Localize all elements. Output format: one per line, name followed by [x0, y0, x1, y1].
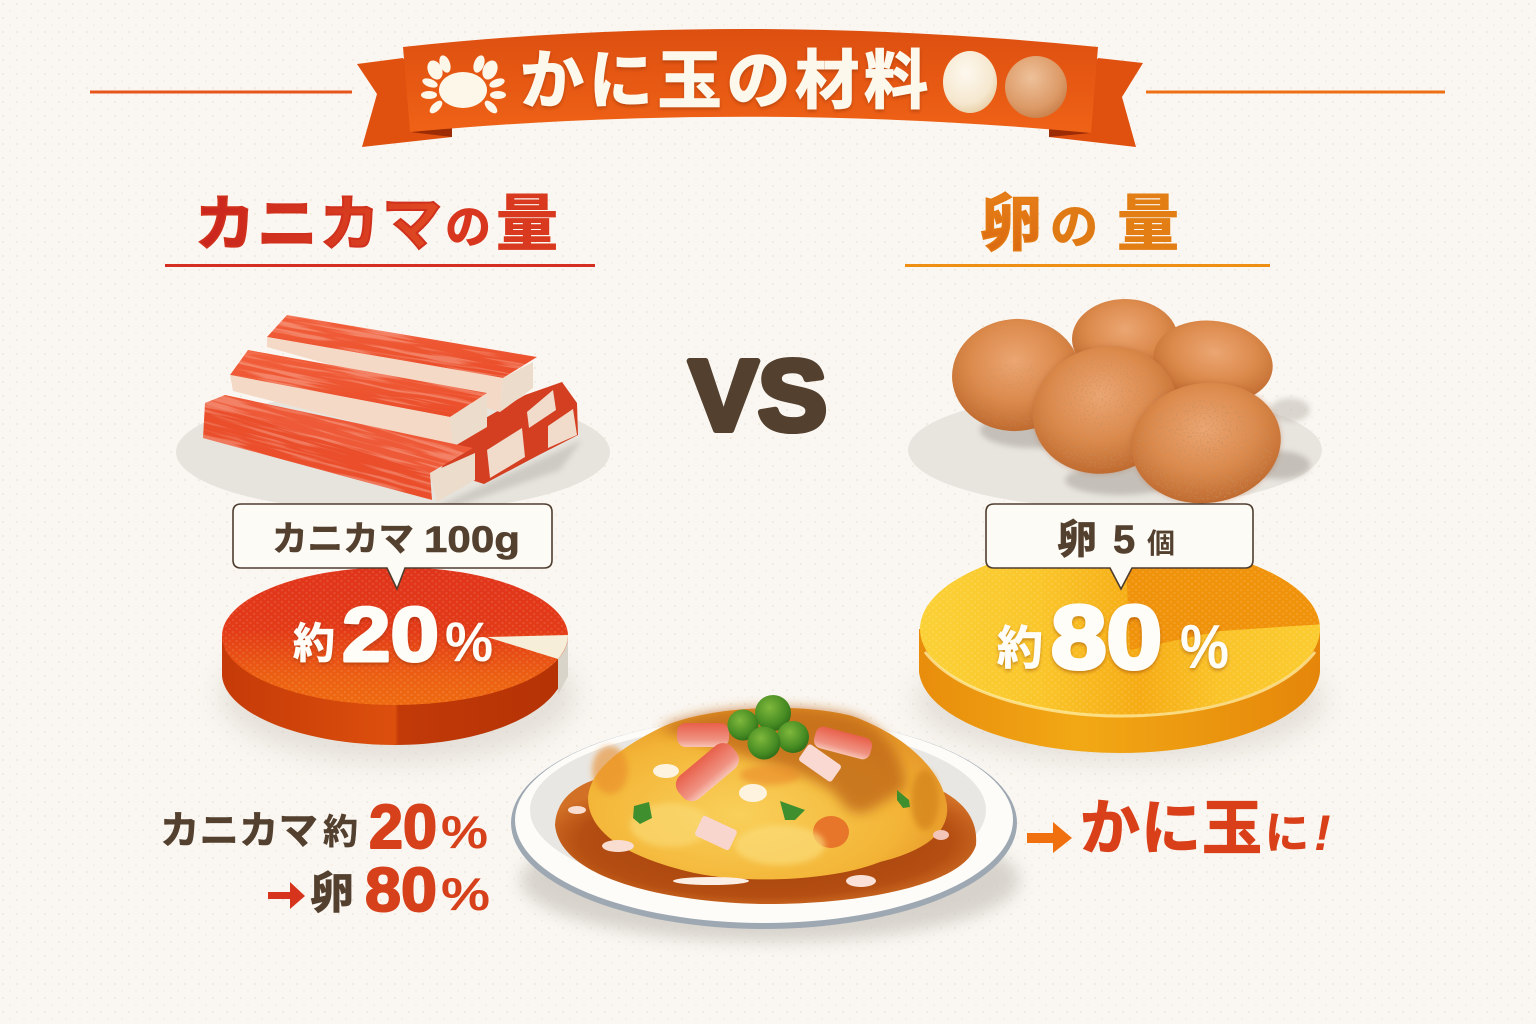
pie value: [293, 592, 493, 678]
pie wedge: [487, 635, 568, 659]
banner title text: かに玉の材料: [520, 30, 928, 122]
ribbon tails: [357, 58, 1143, 147]
summary text: crab stick 20% to egg 80%: [160, 793, 490, 925]
pie value: %: [445, 610, 493, 673]
callout: five eggs: [986, 504, 1253, 589]
arrow: [268, 882, 305, 909]
summary text: crab stick 20% to egg 80%: 卵: [310, 857, 354, 921]
pie side wall: [222, 636, 568, 745]
egg: middle: [1018, 330, 1192, 490]
front stick: [203, 395, 475, 502]
heading: crab stick amount: [165, 173, 595, 267]
pie chart: crab stick 20%: [220, 567, 576, 763]
pie value: 80: [1051, 588, 1162, 688]
callout: five eggs: 個: [1147, 522, 1175, 562]
result text: becomes kani-tama: かに玉: [1080, 780, 1262, 867]
pie rim highlight: [925, 652, 1315, 716]
summary text: crab stick 20% to egg 80%: 20: [369, 793, 437, 862]
icon: crab: [421, 54, 506, 115]
illustration: five brown eggs on a plate: [908, 299, 1322, 513]
heading: crab stick amount: の: [445, 191, 491, 257]
pie value: 20: [342, 592, 439, 678]
illustration: crab sticks on a plate: [176, 315, 610, 504]
small rear stick ends: [440, 382, 578, 484]
callout: crab stick 100g: [233, 504, 552, 589]
crab pieces: [671, 723, 874, 851]
pie wedge: orange slice: [1126, 564, 1320, 650]
title banner: [90, 29, 1445, 147]
heading: crab stick amount: 量: [496, 173, 558, 263]
icon: brown egg: [1005, 56, 1067, 118]
middle stick: [230, 350, 487, 444]
arrow: [1027, 822, 1072, 853]
summary text: crab stick 20% to egg 80%: 80: [365, 856, 437, 925]
back stick: [267, 315, 537, 412]
heading: egg amount: [905, 173, 1270, 267]
illustration: kani-tama dish: [511, 695, 1020, 942]
ribbon body: [403, 29, 1098, 133]
plate: [511, 717, 1017, 929]
pie value: [997, 588, 1229, 688]
heading: egg amount: の: [1050, 187, 1098, 257]
sauce: [555, 778, 976, 904]
pie value: 約: [997, 612, 1043, 678]
callout: five eggs: 卵: [1057, 507, 1097, 565]
result text: becomes kani-tama: !: [1314, 805, 1331, 861]
summary text: crab stick 20% to egg 80%: カニカマ: [160, 800, 318, 856]
pie value: 約: [293, 610, 335, 671]
egg: left: [947, 314, 1085, 436]
summary text: crab stick 20% to egg 80%: 約: [323, 804, 358, 855]
summary text: crab stick 20% to egg 80%: %: [441, 806, 488, 858]
pie side wall: [919, 629, 1320, 753]
callout: crab stick 100g: カニカマ: [272, 511, 414, 562]
callout: crab stick 100g: 100g: [424, 519, 520, 560]
plate shadow: [520, 818, 1020, 942]
peas: [728, 695, 809, 760]
heading: crab stick amount: カニカマ: [195, 176, 442, 263]
omelet: [588, 708, 947, 879]
result text: becomes kani-tama: に: [1265, 797, 1309, 861]
heading: egg amount: 卵: [980, 173, 1042, 263]
pie top face: [222, 567, 568, 705]
summary text: crab stick 20% to egg 80%: %: [441, 868, 490, 920]
VS label: VS: [689, 340, 827, 452]
egg: right: [1148, 313, 1278, 411]
egg: back: [1072, 299, 1178, 379]
green bits and white bits: [568, 764, 949, 887]
pie top face: [920, 543, 1320, 715]
pie value: %: [1180, 613, 1229, 682]
icon: white egg: [943, 51, 997, 113]
egg: front: [1123, 373, 1289, 513]
heading: egg amount: 量: [1117, 173, 1179, 263]
callout: five eggs: 5: [1113, 518, 1135, 562]
result text: becomes kani-tama: [1027, 780, 1331, 867]
pie chart: egg 80%: [915, 540, 1325, 762]
